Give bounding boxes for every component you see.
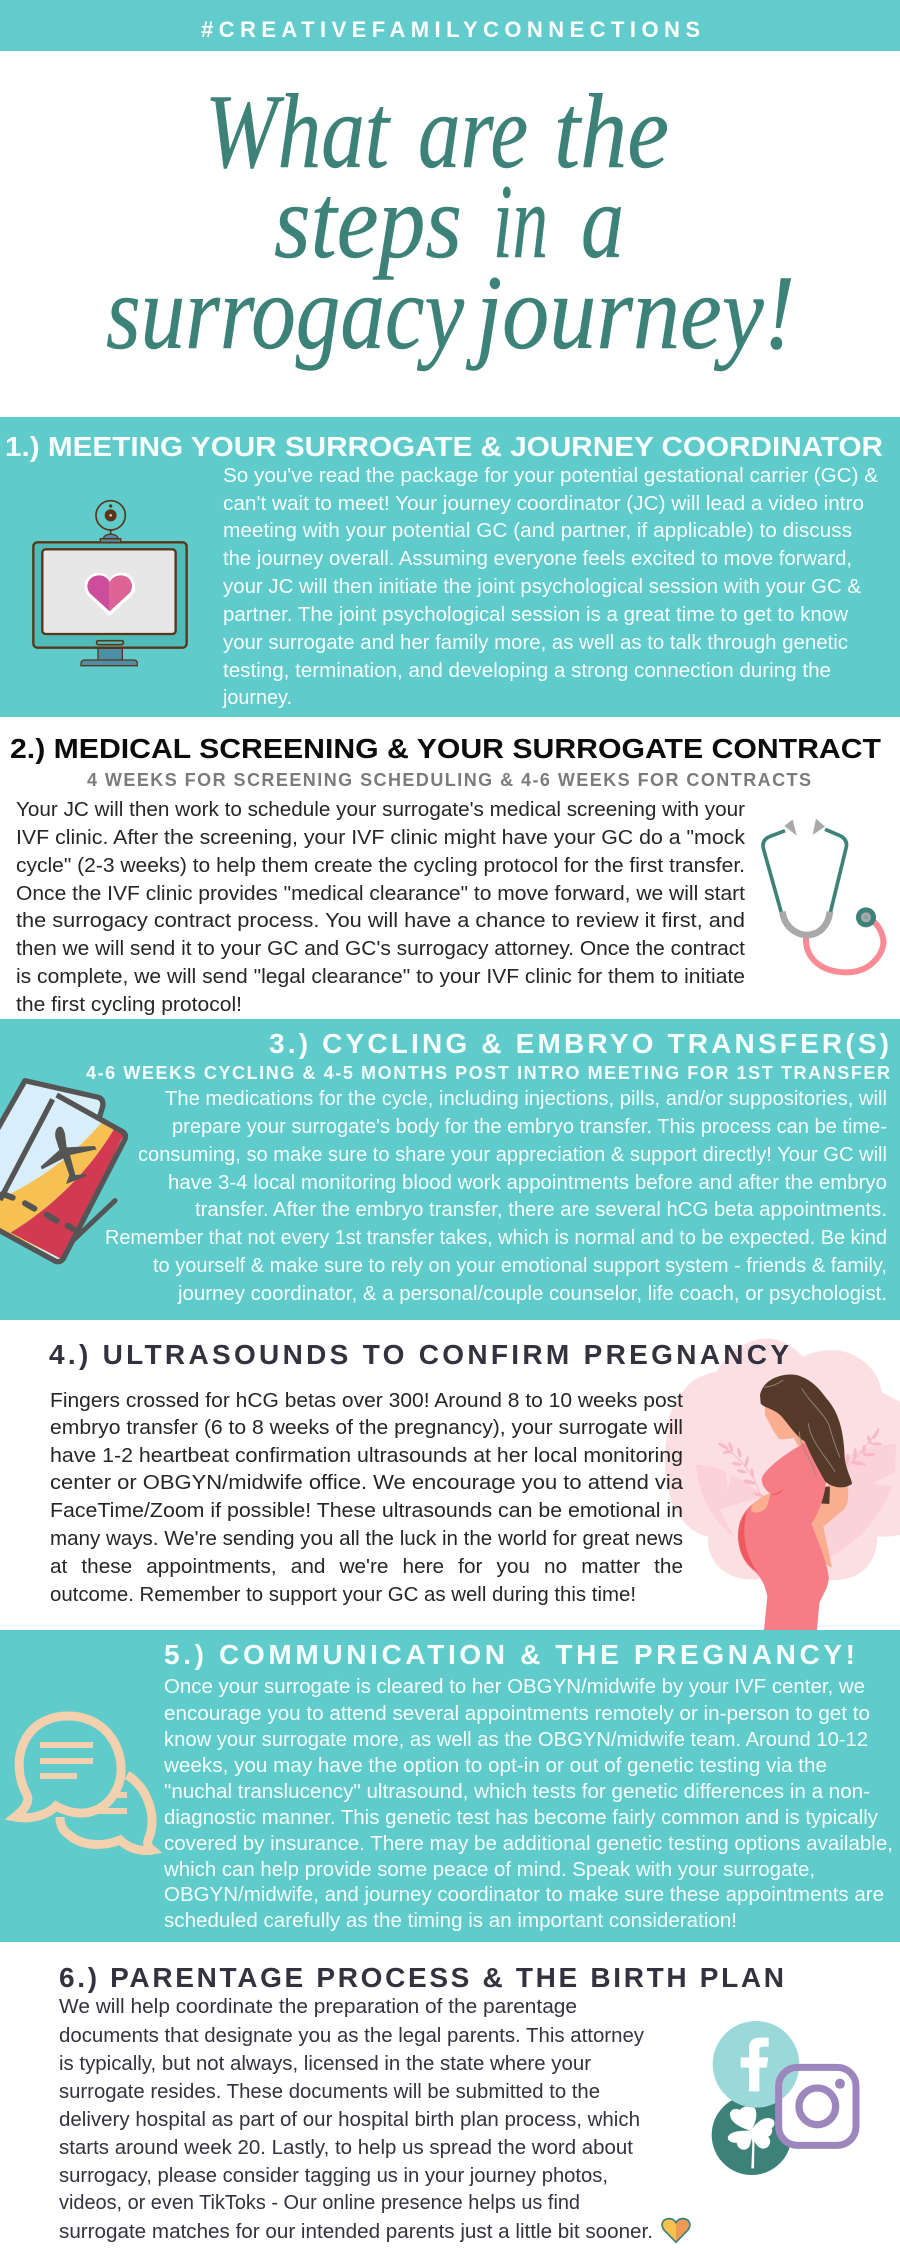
body text: step 4: embryo transfer (6 to 8 weeks of the pregnancy), your surrogate will: [50, 1417, 683, 1439]
heading: step 4: 4.) ULTRASOUNDS TO CONFIRM PREGNANCY: [49, 1339, 789, 1370]
body text: step 2: IVF clinic. After the screening, your IVF clinic might have your GC do a "mock: [16, 827, 746, 849]
illustration: pregnant woman: [665, 1338, 900, 1630]
body text: step 5: Once your surrogate is cleared to her OBGYN/midwife by your IVF center, we: [164, 1676, 865, 1698]
header banner: [0, 0, 900, 51]
body text: step 4: at these appointments, and we're here for you no matter the: [50, 1556, 683, 1578]
title: What: [205, 73, 391, 190]
body text: step 3: [105, 1088, 887, 1305]
body text: step 1: journey.: [222, 687, 292, 709]
panel: step 2 medical screening: [10, 733, 883, 1016]
body text: step 4: Fingers crossed for hCG betas over 300! Around 8 to 10 weeks post: [50, 1390, 683, 1412]
body text: step 6: delivery hospital as part of our hospital birth plan process, which: [59, 2109, 640, 2131]
heading: step 2: 2.) MEDICAL SCREENING & YOUR SURROGATE CONTRACT: [10, 733, 881, 764]
title: [106, 73, 795, 371]
body text: step 3: Remember that not every 1st transfer takes, which is normal and to be expected. Be kind: [105, 1227, 887, 1249]
body text: step 2: then we will send it to your GC and GC's surrogacy attorney. Once the contract: [16, 938, 745, 960]
body text: step 3: transfer. After the embryo transfer, there are several hCG beta appointments.: [195, 1199, 887, 1221]
panel: step 6 parentage process: [59, 1962, 856, 2243]
title: are: [418, 73, 528, 190]
body text: step 6: surrogate matches for our intended parents just a little bit sooner.: [59, 2221, 653, 2243]
body text: step 1: [222, 465, 879, 709]
body text: step 4: have 1-2 heartbeat confirmation ultrasounds at her local monitoring: [50, 1445, 683, 1467]
body text: step 5: which can help provide some peace of mind. Speak with your surrogate,: [163, 1859, 815, 1881]
header banner: #CREATIVEFAMILYCONNECTIONS: [201, 17, 700, 42]
body text: step 6: documents that designate you as the legal parents. This attorney: [59, 2025, 644, 2047]
body text: step 2: [16, 799, 746, 1016]
panel: step 5 communication and the pregnancy: [0, 1630, 900, 1942]
title: steps: [274, 163, 462, 280]
body text: step 5: OBGYN/midwife, and journey coordinator to make sure these appointments are: [164, 1884, 884, 1906]
body text: step 4: many ways. We're sending you all the luck in the world for great news: [50, 1528, 683, 1550]
body text: step 1: partner. The joint psychological session is a great time to get to know: [223, 604, 849, 626]
body text: step 3: have 3-4 local monitoring blood work appointments before and after the embryo: [168, 1172, 887, 1194]
icon: chat bubbles: [15, 1716, 152, 1851]
subheading: step 3 timing: 4-6 WEEKS CYCLING & 4-5 MONTHS POST INTRO MEETING FOR 1ST TRANSFER: [86, 1063, 890, 1083]
icon: computer monitor with heart: [33, 501, 187, 666]
body text: step 1: So you've read the package for your potential gestational carrier (GC) &: [223, 465, 879, 487]
body text: step 6: [59, 1996, 653, 2243]
title: journey!: [465, 254, 795, 371]
body text: step 5: diagnostic manner. This genetic test has become fairly common and is typically: [164, 1807, 878, 1829]
body text: step 5: "nuchal translucency" ultrasound, which tests for genetic differences in a non-: [164, 1781, 870, 1803]
body text: step 5: scheduled carefully as the timing is an important consideration!: [164, 1910, 737, 1932]
heading: step 5: 5.) COMMUNICATION & THE PREGNANCY!: [164, 1639, 855, 1670]
body text: step 5: know your surrogate more, as well as the OBGYN/midwife team. Around 10-12: [164, 1729, 868, 1751]
body text: step 6: videos, or even TikToks - Our online presence helps us find: [59, 2192, 580, 2214]
body text: step 2: the first cycling protocol!: [16, 994, 242, 1016]
body text: step 4: [50, 1390, 684, 1606]
body text: step 6: We will help coordinate the preparation of the parentage: [59, 1996, 577, 2018]
title: in: [493, 163, 548, 280]
body text: step 1: your JC will then initiate the joint psychological session with your GC &: [223, 576, 862, 598]
body text: step 2: Once the IVF clinic provides "medical clearance" to move forward, we will start: [16, 883, 745, 905]
body text: step 1: your surrogate and her family more, as well as to talk through genetic: [223, 632, 848, 654]
body text: step 2: Your JC will then work to schedule your surrogate's medical screening with your: [16, 799, 745, 821]
body text: step 6: surrogate resides. These documents will be submitted to the: [59, 2081, 600, 2103]
body text: step 3: to yourself & make sure to rely on your emotional support system - friends & family,: [153, 1255, 887, 1277]
body text: step 5: covered by insurance. There may be additional genetic testing options available,: [164, 1833, 893, 1855]
heading: step 1: 1.) MEETING YOUR SURROGATE & JOURNEY COORDINATOR: [5, 431, 883, 462]
body text: step 4: center or OBGYN/midwife office. We encourage you to attend via: [50, 1472, 684, 1494]
panel: step 1 meeting your surrogate: [0, 417, 900, 717]
body text: step 1: can't wait to meet! Your journey coordinator (JC) will lead a video intro: [223, 493, 864, 515]
heading: step 3: 3.) CYCLING & EMBRYO TRANSFER(S): [269, 1028, 889, 1059]
title: surrogacy: [106, 254, 465, 371]
title: a: [581, 163, 624, 280]
body text: step 3: The medications for the cycle, including injections, pills, and/or suppositories, will: [165, 1088, 887, 1110]
body text: step 4: outcome. Remember to support your GC as well during this time!: [50, 1584, 636, 1606]
icon: stethoscope: [763, 819, 883, 972]
body text: step 6: surrogacy, please consider tagging us in your journey photos,: [59, 2165, 608, 2187]
body text: step 2: the surrogacy contract process. You will have a chance to review it first, and: [16, 910, 745, 932]
body text: step 1: the journey overall. Assuming everyone feels excited to move forward,: [223, 548, 852, 570]
title: the: [554, 73, 669, 190]
body text: step 5: encourage you to attend several appointments remotely or in-person to get to: [164, 1703, 870, 1725]
body text: step 2: cycle" (2-3 weeks) to help them create the cycling protocol for the first transfer.: [16, 855, 745, 877]
subheading: step 2 timing: 4 WEEKS FOR SCREENING SCHEDULING & 4-6 WEEKS FOR CONTRACTS: [87, 770, 811, 790]
body text: step 2: is complete, we will send "legal clearance" to your IVF clinic for them to initiate: [16, 966, 745, 988]
body text: step 3: prepare your surrogate's body for the embryo transfer. This process can be time-: [172, 1116, 887, 1138]
body text: step 5: weeks, you may have the option to opt-in or out of genetic testing via the: [163, 1755, 827, 1777]
icon: plane tickets: [0, 1081, 125, 1262]
heading: step 6: 6.) PARENTAGE PROCESS & THE BIRTH PLAN: [59, 1962, 784, 1993]
body text: step 1: testing, termination, and developing a strong connection during the: [223, 660, 831, 682]
icon: social media logos: [712, 2021, 856, 2175]
body text: step 3: journey coordinator, & a personal/couple counselor, life coach, or psychologist.: [177, 1283, 887, 1305]
body text: step 5: [163, 1676, 893, 1932]
panel: step 3 cycling and embryo transfer: [0, 1019, 900, 1320]
body text: step 3: consuming, so make sure to share your appreciation & support directly! Your GC will: [138, 1144, 887, 1166]
panel: step 4 ultrasounds: [49, 1338, 900, 1630]
icon: small orange heart: [662, 2219, 690, 2242]
body text: step 4: FaceTime/Zoom if possible! These ultrasounds can be emotional in: [50, 1500, 683, 1522]
body text: step 6: is typically, but not always, licensed in the state where your: [59, 2053, 591, 2075]
body text: step 6: starts around week 20. Lastly, to help us spread the word about: [59, 2137, 633, 2159]
body text: step 1: meeting with your potential GC (and partner, if applicable) to discuss: [223, 520, 852, 542]
